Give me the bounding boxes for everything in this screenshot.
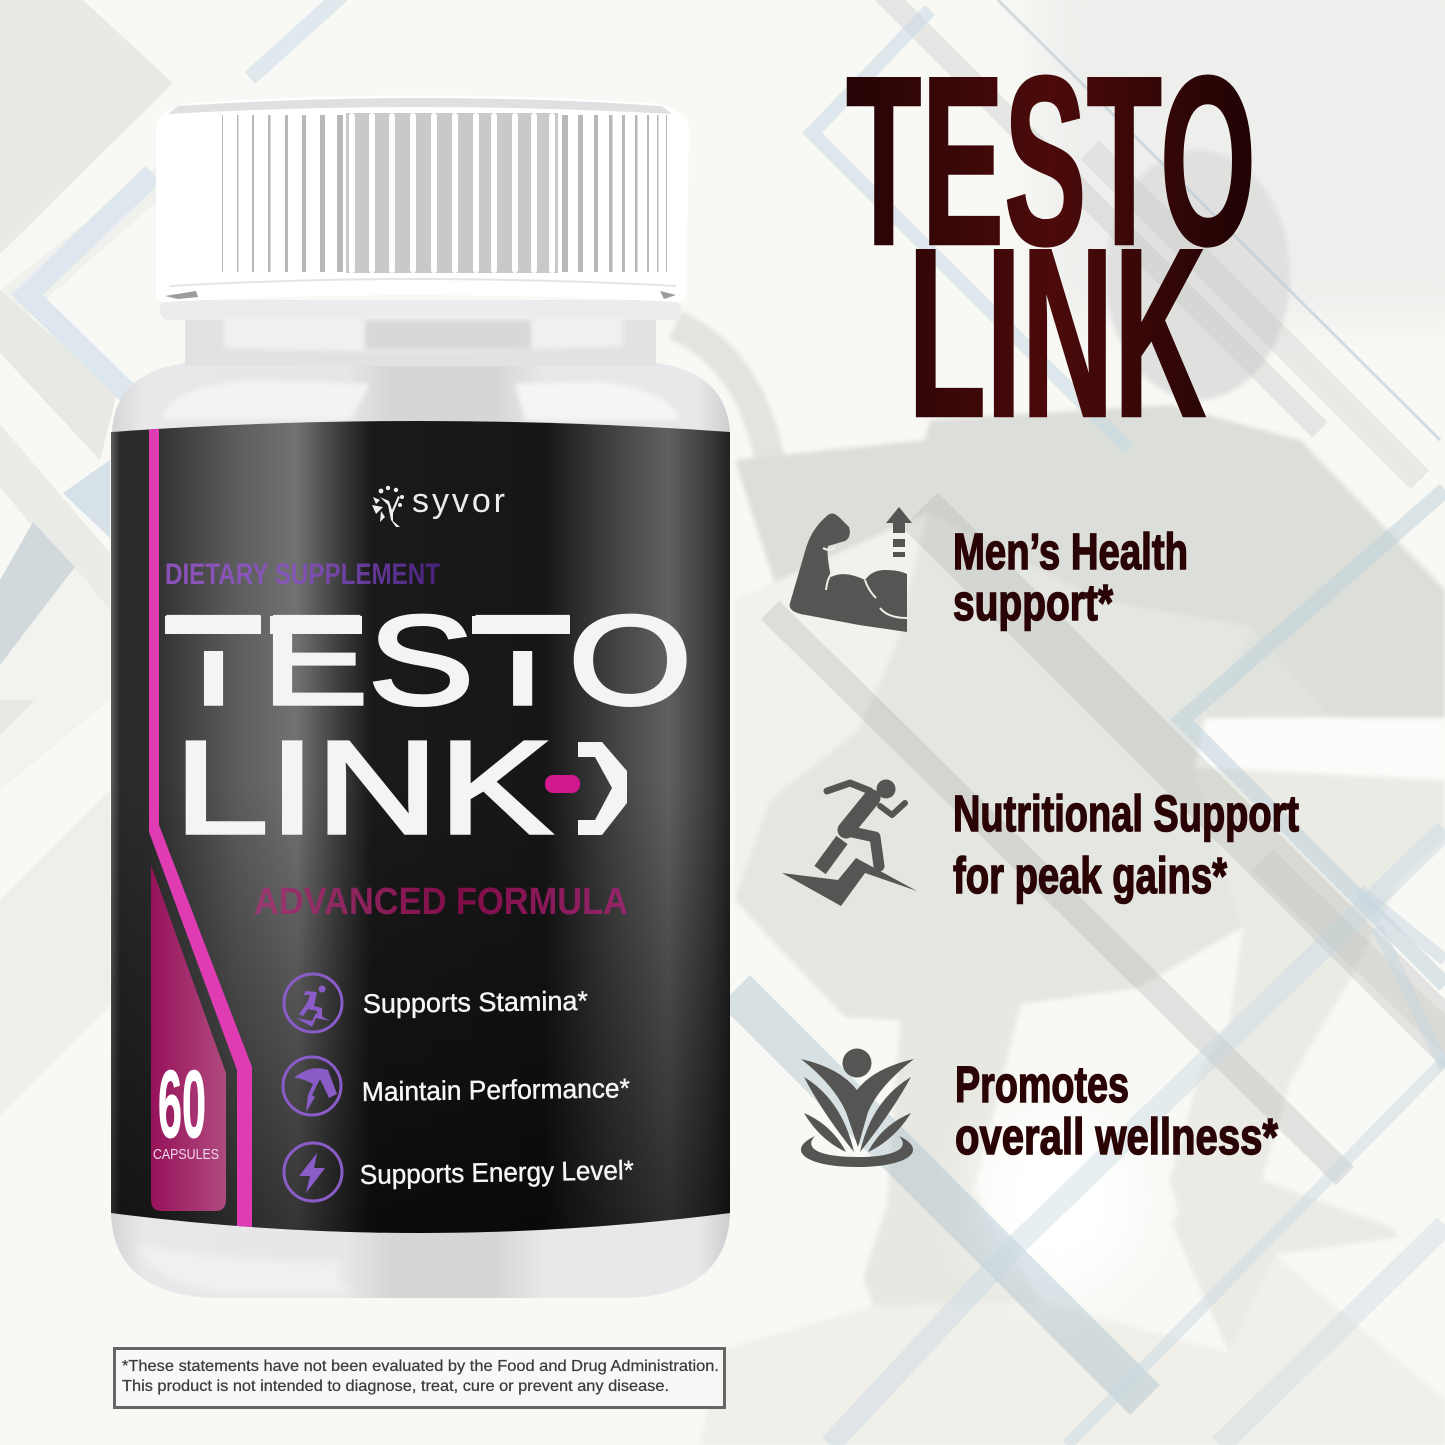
capsule count panel: 60 bbox=[158, 1051, 206, 1158]
brand logo syvor bbox=[372, 482, 505, 527]
capsule count panel bbox=[151, 865, 226, 1211]
cap ribs bbox=[349, 113, 555, 273]
disclaimer box: This product is not intended to diagnose, treat, cure or prevent any disease. bbox=[122, 1378, 669, 1395]
icon: tree bbox=[372, 486, 404, 527]
label benefit: performance: Maintain Performance* bbox=[362, 1073, 631, 1107]
icon: umbrella bolt bbox=[294, 1068, 337, 1112]
bottle cap bbox=[156, 96, 689, 302]
bottle neck bbox=[160, 300, 681, 366]
label benefit: stamina: Supports Stamina* bbox=[363, 986, 589, 1019]
feature: overall wellness: overall wellness* bbox=[955, 1108, 1278, 1165]
label benefit: stamina bbox=[284, 974, 589, 1032]
athlete silhouette bbox=[675, 150, 1445, 1445]
feature: nutritional support: Nutritional Support bbox=[953, 785, 1299, 842]
product name on label: link with bracket: LINK bbox=[174, 714, 552, 861]
bottom highlight bbox=[135, 1245, 355, 1293]
icon: lightning bbox=[299, 1153, 325, 1193]
capsule count panel: CAPSULES bbox=[153, 1146, 219, 1163]
icon: runner bbox=[782, 780, 917, 906]
feature: nutritional support bbox=[782, 780, 1299, 906]
label benefit: energy bbox=[284, 1143, 635, 1201]
product name on label: testo: TESTO bbox=[165, 589, 692, 731]
icon: flexed bicep with arrow bbox=[790, 507, 912, 632]
text: advanced formula: ADVANCED FORMULA bbox=[254, 881, 628, 923]
bottle body bbox=[111, 363, 730, 1298]
icon: small runner bbox=[296, 986, 330, 1027]
diagonal bands bbox=[735, 0, 1445, 1445]
shoulder highlights bbox=[162, 380, 680, 420]
icon: wellness figure bbox=[801, 1048, 914, 1167]
feature: mens health: support* bbox=[953, 574, 1113, 631]
feature: mens health: Men’s Health bbox=[953, 523, 1188, 580]
brand logo syvor: syvor bbox=[412, 482, 505, 520]
product bottle bbox=[111, 96, 730, 1298]
title bbox=[846, 27, 1256, 468]
left chevron shapes bbox=[0, 0, 345, 1115]
label bbox=[111, 415, 730, 1255]
label benefit: energy: Supports Energy Level* bbox=[360, 1155, 635, 1190]
text: dietary supplement: DIETARY SUPPLEMENT bbox=[165, 558, 440, 591]
disclaimer box: *These statements have not been evaluated by the Food and Drug Administration. bbox=[122, 1358, 719, 1375]
label benefit: performance bbox=[283, 1057, 631, 1115]
pink stripe bbox=[149, 420, 252, 1240]
feature: overall wellness bbox=[801, 1048, 1278, 1167]
disclaimer box bbox=[114, 1348, 724, 1408]
feature: mens health bbox=[790, 507, 1188, 632]
product name on label: link with bracket bbox=[174, 714, 627, 861]
feature: overall wellness: Promotes bbox=[955, 1056, 1129, 1113]
feature: nutritional support: for peak gains* bbox=[953, 847, 1227, 904]
